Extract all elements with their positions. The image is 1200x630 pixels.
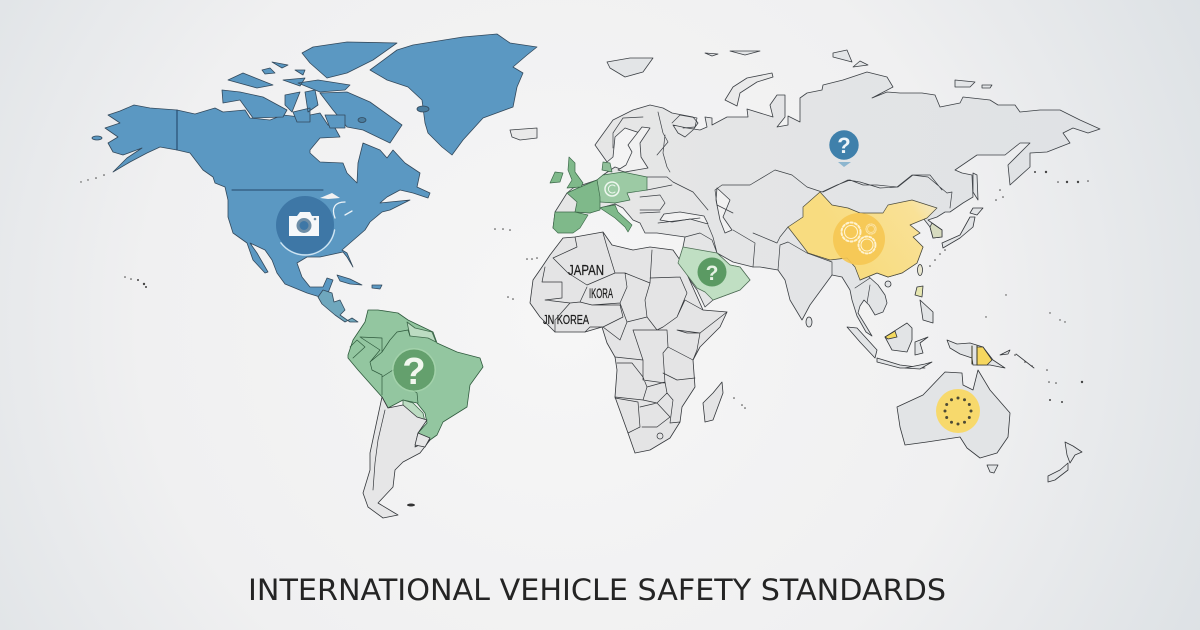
icon: question pin over Russia (829, 130, 859, 167)
region: Arabian Peninsula (green) (678, 247, 750, 300)
small island dots (80, 171, 1089, 409)
icon: camera badge over USA (275, 195, 335, 255)
country borders (613, 112, 952, 303)
labels: misplaced text on Africa: IKORA (589, 285, 613, 301)
icon: Europe ring badge (605, 182, 619, 196)
icon: ring of stars (936, 389, 980, 433)
icon: question badge Brazil (392, 348, 436, 393)
camera glyph (289, 212, 319, 236)
labels: misplaced text on Africa (543, 262, 613, 327)
region: East and Southeast Asia islands (806, 208, 1034, 369)
region: Europe (green) (550, 157, 647, 233)
labels: misplaced text on Africa: JN KOREA (543, 312, 589, 327)
icon: question pin over Russia: ? (837, 133, 851, 158)
Hudson Bay islands and border lines (177, 110, 323, 190)
region: Australia (897, 370, 1010, 473)
labels: misplaced text on Africa: JAPAN (568, 262, 604, 279)
title: INTERNATIONAL VEHICLE SAFETY STANDARDS (248, 573, 946, 607)
icon: question badge Saudi Arabia: ? (706, 262, 718, 285)
world map (80, 34, 1100, 518)
Madagascar (703, 382, 723, 422)
icon: gears badge (833, 213, 885, 265)
region: Africa (grey) (530, 232, 727, 453)
Baltic, Black Sea, Caspian (618, 127, 650, 172)
Southern Cone (363, 397, 430, 518)
region: South America (green) (348, 310, 483, 518)
region: North America and Greenland (blue) (92, 34, 537, 322)
region: China (yellow) (788, 192, 937, 280)
region: Eurasia (grey) (553, 72, 1100, 336)
region: New Zealand (1048, 442, 1082, 482)
icon: question badge Brazil: ? (402, 351, 426, 393)
region: small Arctic islands (510, 50, 992, 200)
